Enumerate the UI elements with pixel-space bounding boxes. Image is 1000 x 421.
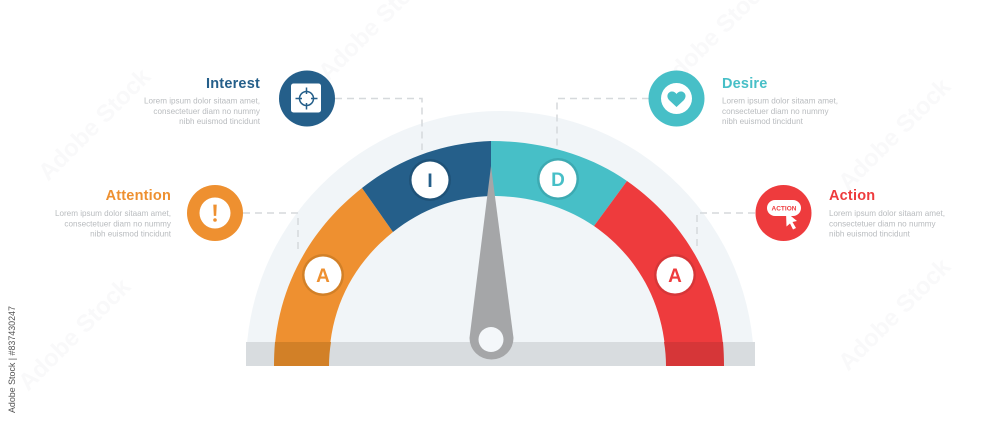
text block: attention xyxy=(55,188,172,238)
text block: attention: nibh euismod tincidunt xyxy=(90,230,172,238)
badge: A action xyxy=(654,254,696,296)
icon: action button with cursor xyxy=(756,185,812,241)
text: Adobe Stock xyxy=(833,73,957,196)
icon: attention exclamation xyxy=(187,185,243,241)
icon: action button with cursor: ACTION xyxy=(772,206,797,212)
base bar xyxy=(246,342,755,366)
text block: attention: consectetuer diam no nummy xyxy=(64,220,172,228)
text block: interest: consectetuer diam no nummy xyxy=(153,107,261,116)
icon: desire heart xyxy=(648,70,704,126)
text block: desire xyxy=(722,76,838,126)
text block: action: Action xyxy=(829,188,875,204)
text: Adobe Stock xyxy=(833,253,957,376)
text block: action: nibh euismod tincidunt xyxy=(829,230,911,238)
text block: interest: Interest xyxy=(206,76,260,92)
needle xyxy=(470,166,514,360)
text block: action: Lorem ipsum dolor sitaam amet, xyxy=(829,209,945,218)
icon: interest target xyxy=(279,70,335,126)
text block: desire: Desire xyxy=(722,76,768,92)
badge: A action: A xyxy=(668,266,682,287)
segment: attention xyxy=(274,188,393,366)
text block: interest: Lorem ipsum dolor sitaam amet, xyxy=(144,96,260,106)
text block: desire: nibh euismod tincidunt xyxy=(722,117,804,126)
text block: action: consectetuer diam no nummy xyxy=(829,220,937,228)
segment: interest xyxy=(362,141,491,232)
text block: attention: Attention xyxy=(106,188,171,204)
base bar overlay on ring xyxy=(274,342,724,366)
text: Adobe Stock xyxy=(13,273,137,396)
text block: interest xyxy=(144,76,261,126)
badge: I interest xyxy=(409,159,451,201)
text: Adobe Stock xyxy=(33,63,157,186)
badge: D desire xyxy=(537,158,579,200)
badge: D desire: D xyxy=(551,170,565,191)
text block: attention: Lorem ipsum dolor sitaam amet, xyxy=(55,209,171,218)
badge: A attention xyxy=(302,254,344,296)
stock id side text: Adobe Stock | #837430247 xyxy=(7,306,17,413)
segment: desire xyxy=(491,141,627,226)
badge: A attention: A xyxy=(316,266,330,287)
text block: interest: nibh euismod tincidunt xyxy=(179,117,261,126)
text block: desire: Lorem ipsum dolor sitaam amet, xyxy=(722,96,838,106)
text block: action xyxy=(829,188,945,238)
gauge background semicircle xyxy=(246,111,754,366)
segment: action xyxy=(594,181,724,366)
badge: I interest: I xyxy=(427,171,433,192)
text block: desire: consectetuer diam no nummy xyxy=(722,107,830,116)
gauge ring xyxy=(274,141,724,366)
connector dashes xyxy=(243,98,755,250)
